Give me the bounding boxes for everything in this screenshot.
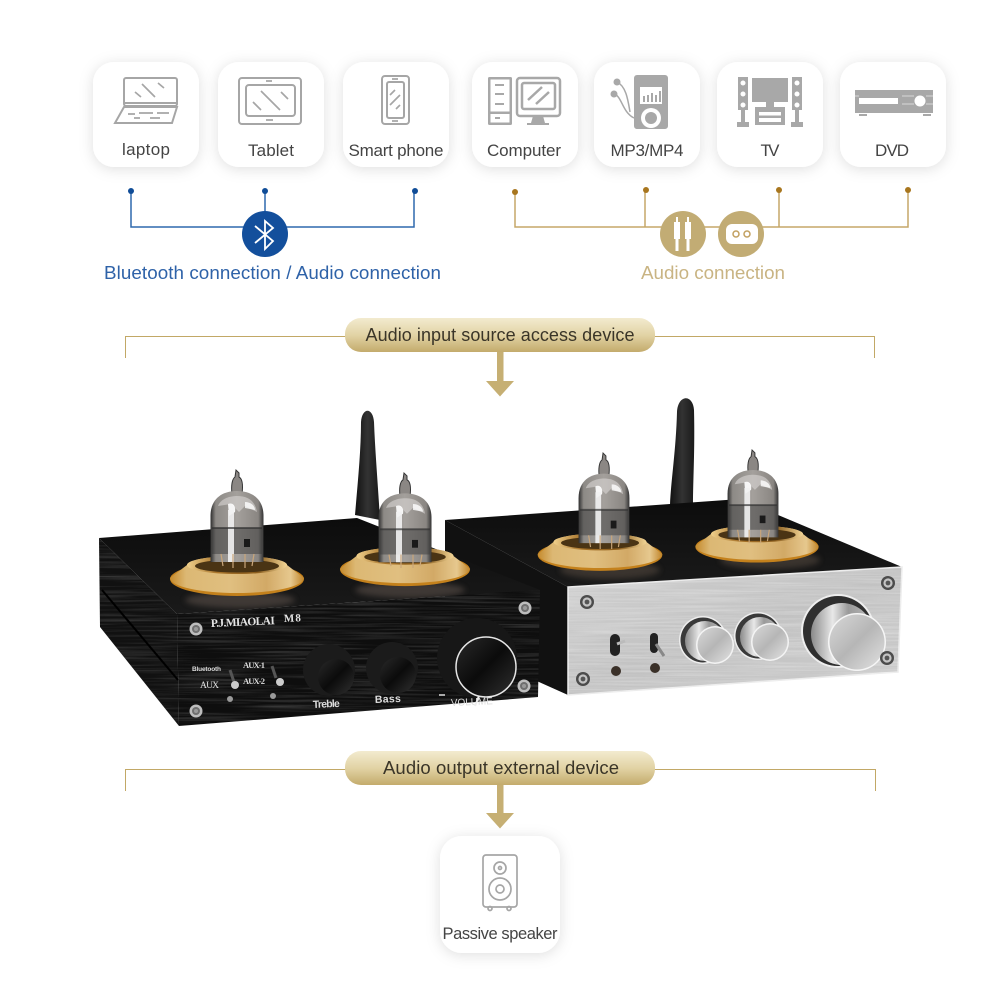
input pill heading: Audio input source access device bbox=[366, 325, 634, 345]
output bracket bbox=[126, 770, 876, 791]
black amp controls and labels: Treble bbox=[313, 698, 340, 711]
icon: audio cables bbox=[660, 211, 706, 257]
card: tablet bbox=[218, 62, 324, 167]
black amp controls and labels: Bass bbox=[375, 693, 401, 706]
silver amp antenna bbox=[670, 398, 694, 505]
black amp controls and labels: VOLUME bbox=[451, 696, 493, 709]
card: DVD bbox=[840, 62, 946, 167]
audio caption: Audio connection bbox=[641, 262, 785, 283]
silver amp tubes bbox=[538, 450, 819, 571]
icon: bluetooth bbox=[242, 211, 288, 257]
card: laptop bbox=[93, 62, 199, 167]
card: smart phone: Smart phone bbox=[348, 141, 444, 160]
card: tablet: Tablet bbox=[248, 141, 294, 160]
card: computer: Computer bbox=[487, 141, 561, 160]
icon: speaker bbox=[483, 855, 517, 910]
black amp antenna bbox=[355, 411, 380, 520]
black amp tubes bbox=[170, 470, 470, 596]
black amp controls and labels: AUX bbox=[200, 681, 219, 691]
panel: audio source devices bbox=[472, 62, 946, 283]
card: TV: TV bbox=[760, 141, 780, 160]
input pill heading bbox=[345, 318, 655, 352]
output pill heading: Audio output external device bbox=[383, 757, 619, 778]
black amp body bbox=[99, 518, 540, 726]
silver amplifier bbox=[445, 398, 902, 695]
input bracket bbox=[126, 336, 874, 358]
black amp controls and labels bbox=[190, 602, 532, 718]
audio connector lines bbox=[512, 187, 911, 227]
bluetooth caption: Bluetooth connection / Audio connection bbox=[104, 262, 441, 283]
output pill heading bbox=[345, 751, 655, 785]
black amp controls and labels: P.J.MIAOLAI bbox=[211, 615, 276, 630]
card: computer bbox=[472, 62, 578, 167]
card: laptop: laptop bbox=[122, 140, 170, 159]
panel: bluetooth source devices bbox=[93, 62, 449, 283]
card: passive speaker: Passive speaker bbox=[442, 925, 558, 943]
silver amp body bbox=[445, 499, 902, 695]
card: MP3/MP4 bbox=[594, 62, 700, 167]
icon: audio jacks bbox=[718, 211, 764, 257]
card: MP3/MP4: MP3/MP4 bbox=[610, 141, 684, 160]
silver amp controls bbox=[576, 576, 895, 686]
card: TV bbox=[717, 62, 823, 167]
card: passive speaker bbox=[440, 836, 560, 953]
card: DVD: DVD bbox=[875, 141, 909, 160]
arrow: output bbox=[486, 785, 514, 828]
black amp controls and labels: M8 bbox=[284, 612, 302, 625]
black amp controls and labels: Bluetooth bbox=[192, 666, 221, 673]
black amp controls and labels: AUX-2 bbox=[243, 676, 265, 686]
black amplifier bbox=[99, 411, 540, 726]
bluetooth connector lines bbox=[128, 188, 418, 227]
arrow: input bbox=[486, 352, 514, 396]
black amp controls and labels: AUX-1 bbox=[243, 660, 265, 670]
card: smart phone bbox=[343, 62, 449, 167]
